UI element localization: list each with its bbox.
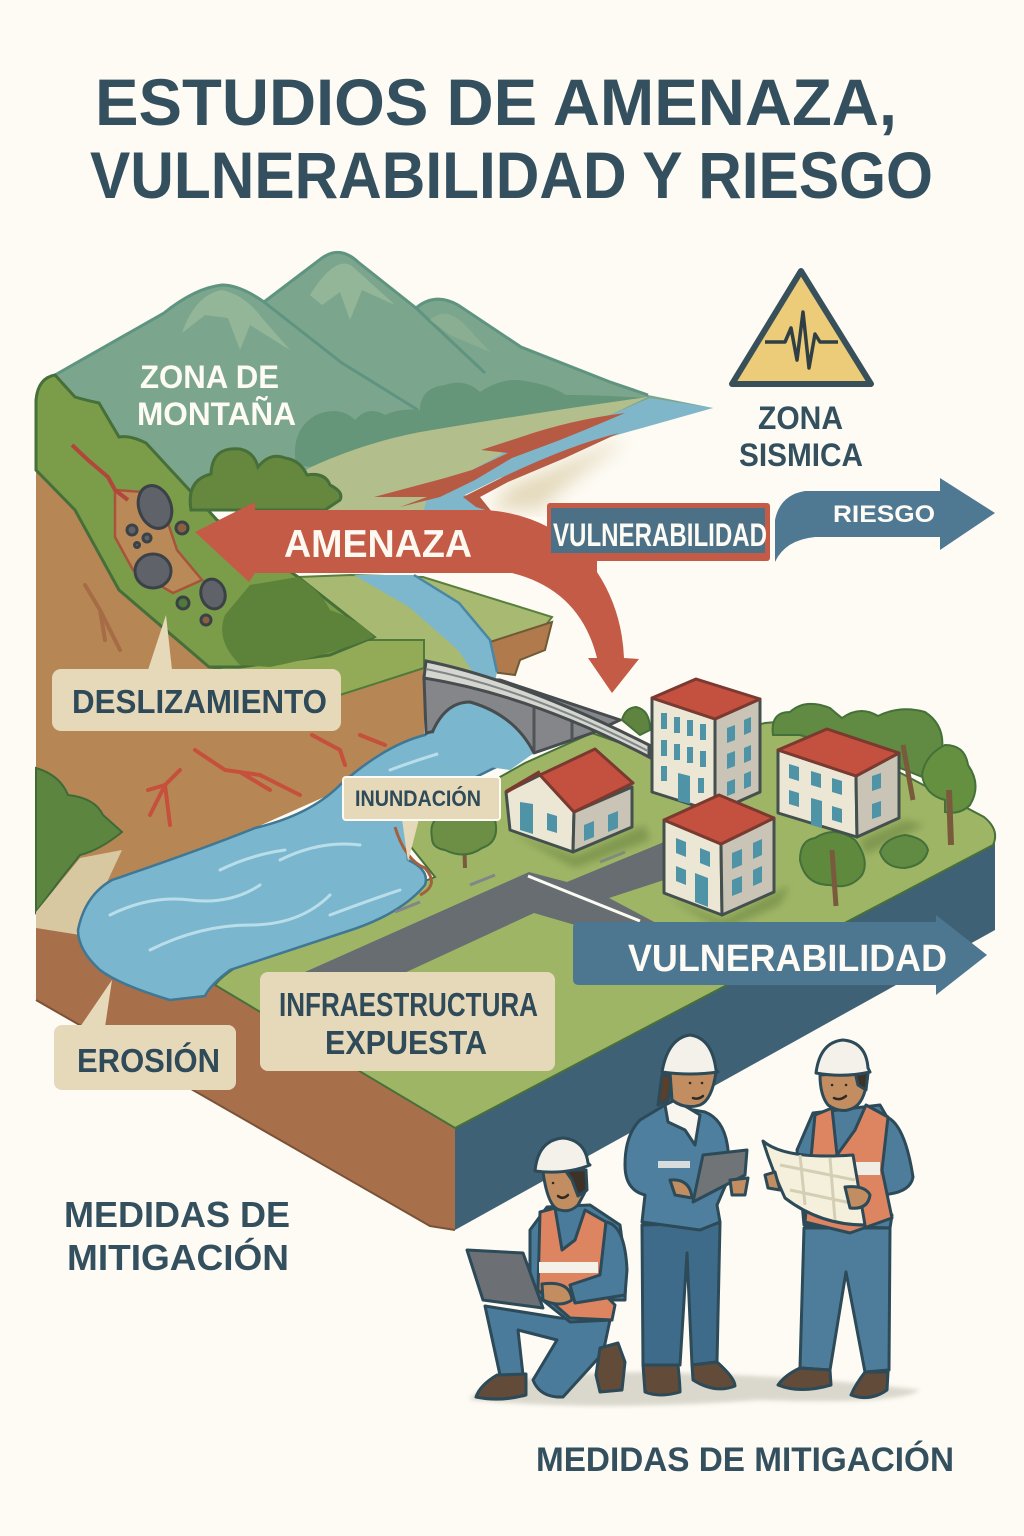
callout: infraestructura expuesta: INFRAESTRUCTURA — [279, 986, 538, 1023]
bridge — [424, 661, 649, 770]
label: zona sismica — [739, 400, 863, 473]
bush behind arrow — [190, 449, 341, 510]
brown cliff — [36, 470, 424, 930]
distant forest — [295, 380, 646, 467]
strip under mountain — [209, 640, 424, 695]
head — [543, 1170, 586, 1211]
title: ESTUDIOS DE AMENAZA, — [95, 65, 897, 139]
callout: inundacion: INUNDACIÓN — [355, 786, 481, 811]
title — [90, 65, 933, 212]
lower left bush — [36, 768, 122, 912]
river and flood water — [78, 720, 531, 1000]
callout: deslizamiento — [52, 615, 341, 731]
label: zona de montaña: ZONA DE — [140, 359, 279, 395]
building back left — [652, 679, 760, 812]
callout: deslizamiento: DESLIZAMIENTO — [72, 683, 327, 720]
main green surface — [215, 720, 995, 1128]
rocks — [127, 481, 228, 625]
block side faces — [36, 843, 995, 1230]
label: zona sismica: ZONA — [758, 400, 843, 436]
house — [506, 749, 633, 852]
label: zona de montaña: MONTAÑA — [137, 396, 296, 432]
tree by river — [431, 815, 496, 868]
heading: medidas de mitigacion left: MITIGACIÓN — [67, 1236, 289, 1278]
back trees — [622, 704, 976, 906]
distant plateau — [298, 575, 552, 705]
laptop — [467, 1250, 543, 1308]
building front — [664, 795, 774, 915]
arrow: amenaza — [195, 502, 639, 693]
distant river — [374, 398, 713, 512]
building shadows — [510, 820, 925, 930]
arrow: riesgo — [775, 478, 995, 562]
label: vulnerabilidad small — [547, 503, 770, 561]
label: vulnerabilidad small: VULNERABILIDAD — [553, 517, 767, 553]
heading: medidas de mitigacion bottom: MEDIDAS DE MITIGACIÓN — [536, 1441, 954, 1479]
valley — [290, 397, 648, 515]
heading: medidas de mitigacion left — [64, 1194, 290, 1278]
sandy beach — [36, 850, 122, 935]
callout: infraestructura expuesta — [260, 972, 555, 1071]
heading: medidas de mitigacion left: MEDIDAS DE — [64, 1194, 290, 1235]
face — [553, 1183, 568, 1198]
torso — [530, 1205, 626, 1322]
hands — [542, 1283, 572, 1304]
worker: kneeling with laptop — [467, 1138, 627, 1399]
arrow: riesgo: RIESGO — [833, 501, 935, 528]
road — [305, 842, 664, 992]
face — [832, 1085, 846, 1099]
worker: woman with tablet — [625, 1035, 748, 1395]
soft river shadow — [490, 440, 620, 510]
label: zona de montaña — [137, 359, 296, 432]
landslide scar — [115, 490, 202, 593]
lower bushes — [222, 577, 374, 667]
building right — [778, 729, 899, 837]
title: VULNERABILIDAD Y RIESGO — [90, 138, 933, 212]
worker: man with map — [763, 1040, 913, 1398]
callout: erosion — [54, 980, 236, 1090]
distant mountains — [55, 252, 713, 510]
ground shadow — [470, 1372, 920, 1406]
arrow: vulnerabilidad: VULNERABILIDAD — [628, 938, 947, 980]
legs — [485, 1306, 610, 1397]
hat — [535, 1138, 590, 1172]
face — [690, 1083, 703, 1099]
terrain block illustration — [36, 252, 995, 1230]
river bank — [395, 827, 431, 895]
label: zona sismica: SISMICA — [739, 437, 863, 473]
callout: infraestructura expuesta: EXPUESTA — [325, 1024, 487, 1061]
cliff cracks — [85, 585, 385, 825]
callout: inundacion — [343, 777, 500, 862]
callout: erosion: EROSIÓN — [77, 1042, 220, 1079]
icon: seismic warning triangle — [732, 271, 871, 384]
arrow: amenaza: AMENAZA — [284, 523, 472, 566]
arrow: vulnerabilidad — [573, 915, 987, 995]
left hill slope — [36, 375, 374, 667]
